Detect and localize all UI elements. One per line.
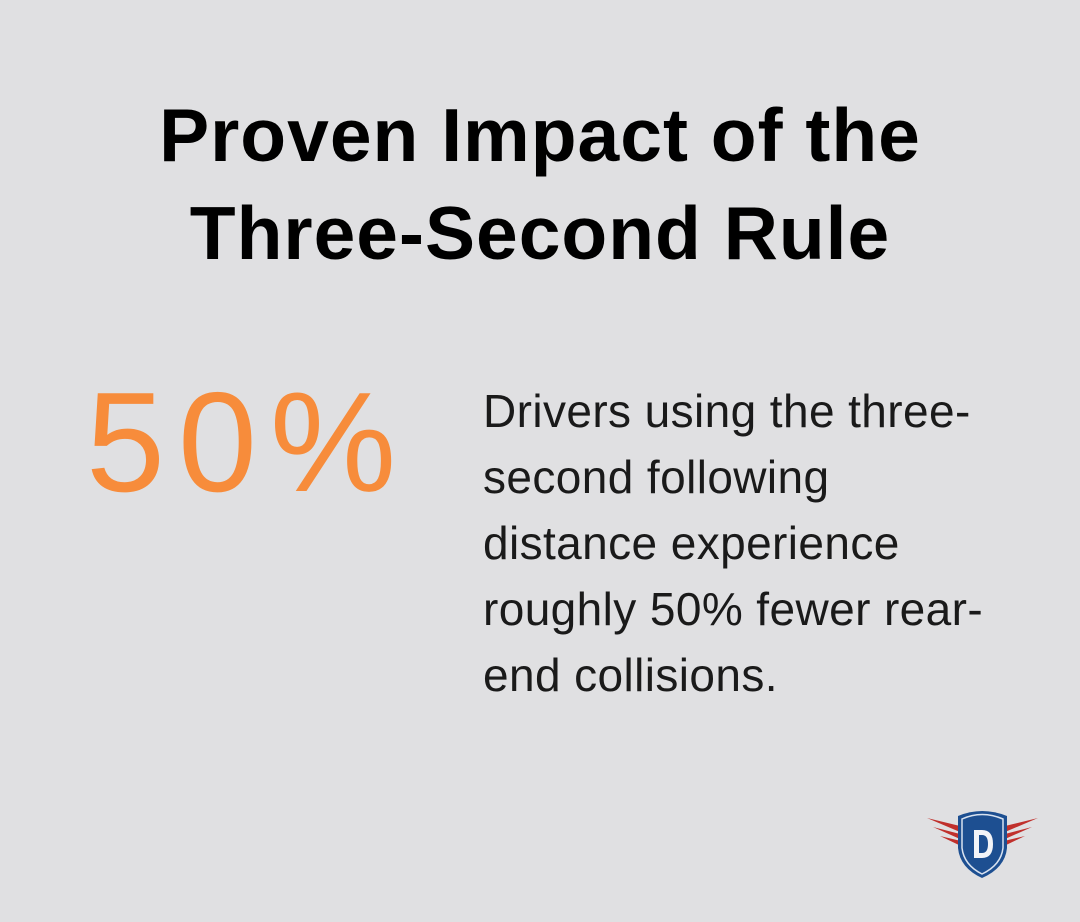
wings (927, 818, 1038, 846)
description text: distance experience (483, 517, 900, 569)
description text (483, 385, 983, 701)
description text: second following (483, 451, 830, 503)
description text: roughly 50% fewer rear- (483, 583, 983, 635)
icon: logo shield with wings (927, 811, 1038, 878)
title: Proven Impact of the (159, 93, 921, 177)
big statistic: 50% (86, 363, 409, 522)
description text: Drivers using the three- (483, 385, 971, 437)
title: Three-Second Rule (190, 191, 890, 275)
description text: end collisions. (483, 649, 778, 701)
title (159, 93, 921, 275)
